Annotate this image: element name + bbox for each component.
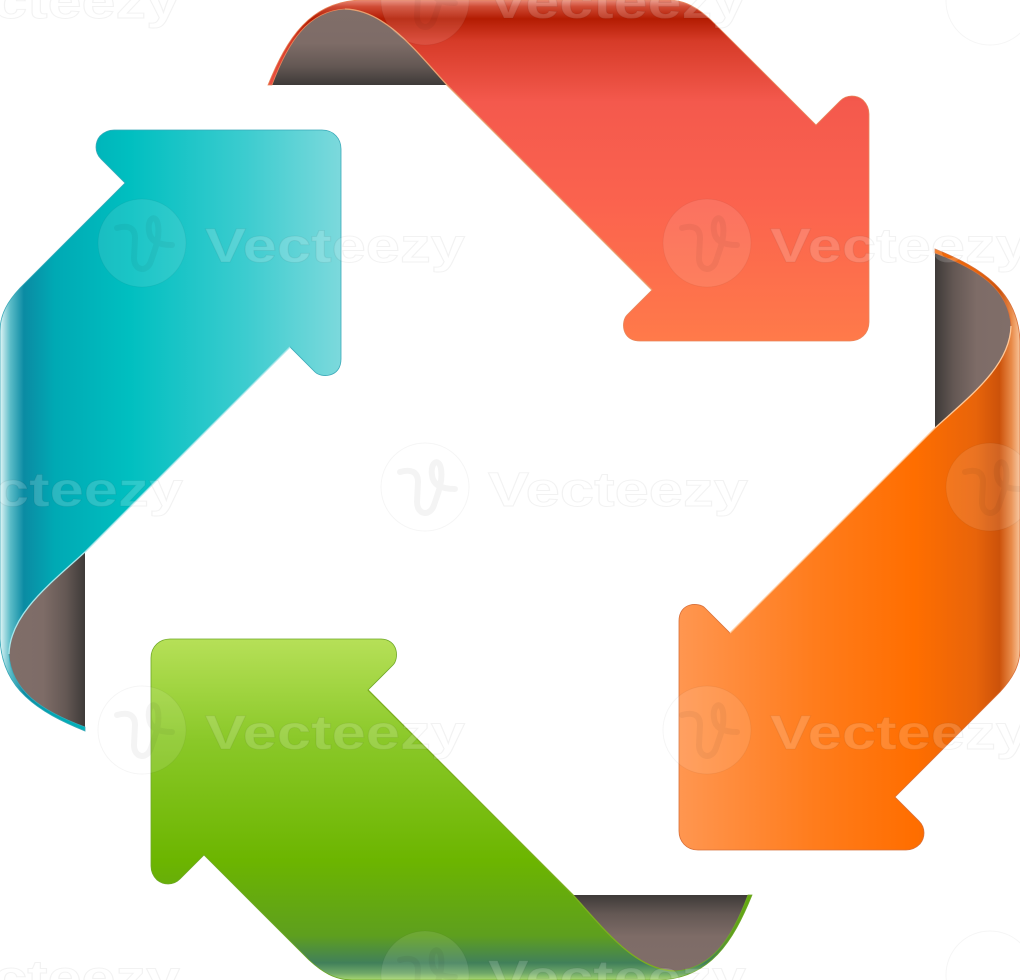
teal fold edge highlight <box>9 347 290 654</box>
arrow: orange, pointing bottom-left <box>679 249 1020 850</box>
orange fold edge highlight <box>730 326 1011 633</box>
red ribbon fold <box>270 9 447 85</box>
watermark words: Vecteezy <box>205 707 465 760</box>
teal arrow body <box>0 130 341 731</box>
green ribbon fold <box>573 895 750 971</box>
watermark words: Vecteezy <box>770 707 1020 760</box>
teal ribbon fold <box>9 552 85 729</box>
watermark words: Vecteezy <box>205 220 465 273</box>
red arrow body <box>268 0 869 341</box>
arrow: teal, pointing top-right <box>0 130 341 731</box>
watermark words: Vecteezy <box>770 220 1020 273</box>
orange ribbon fold <box>935 251 1011 428</box>
green arrow body <box>151 639 752 980</box>
watermark words: Vecteezy <box>488 464 748 517</box>
green fold edge highlight <box>368 690 675 971</box>
red fold edge highlight <box>345 9 652 290</box>
orange arrow body <box>679 249 1020 850</box>
arrow: green, pointing top-left <box>151 639 752 980</box>
arrow: red, pointing bottom-right <box>268 0 869 341</box>
